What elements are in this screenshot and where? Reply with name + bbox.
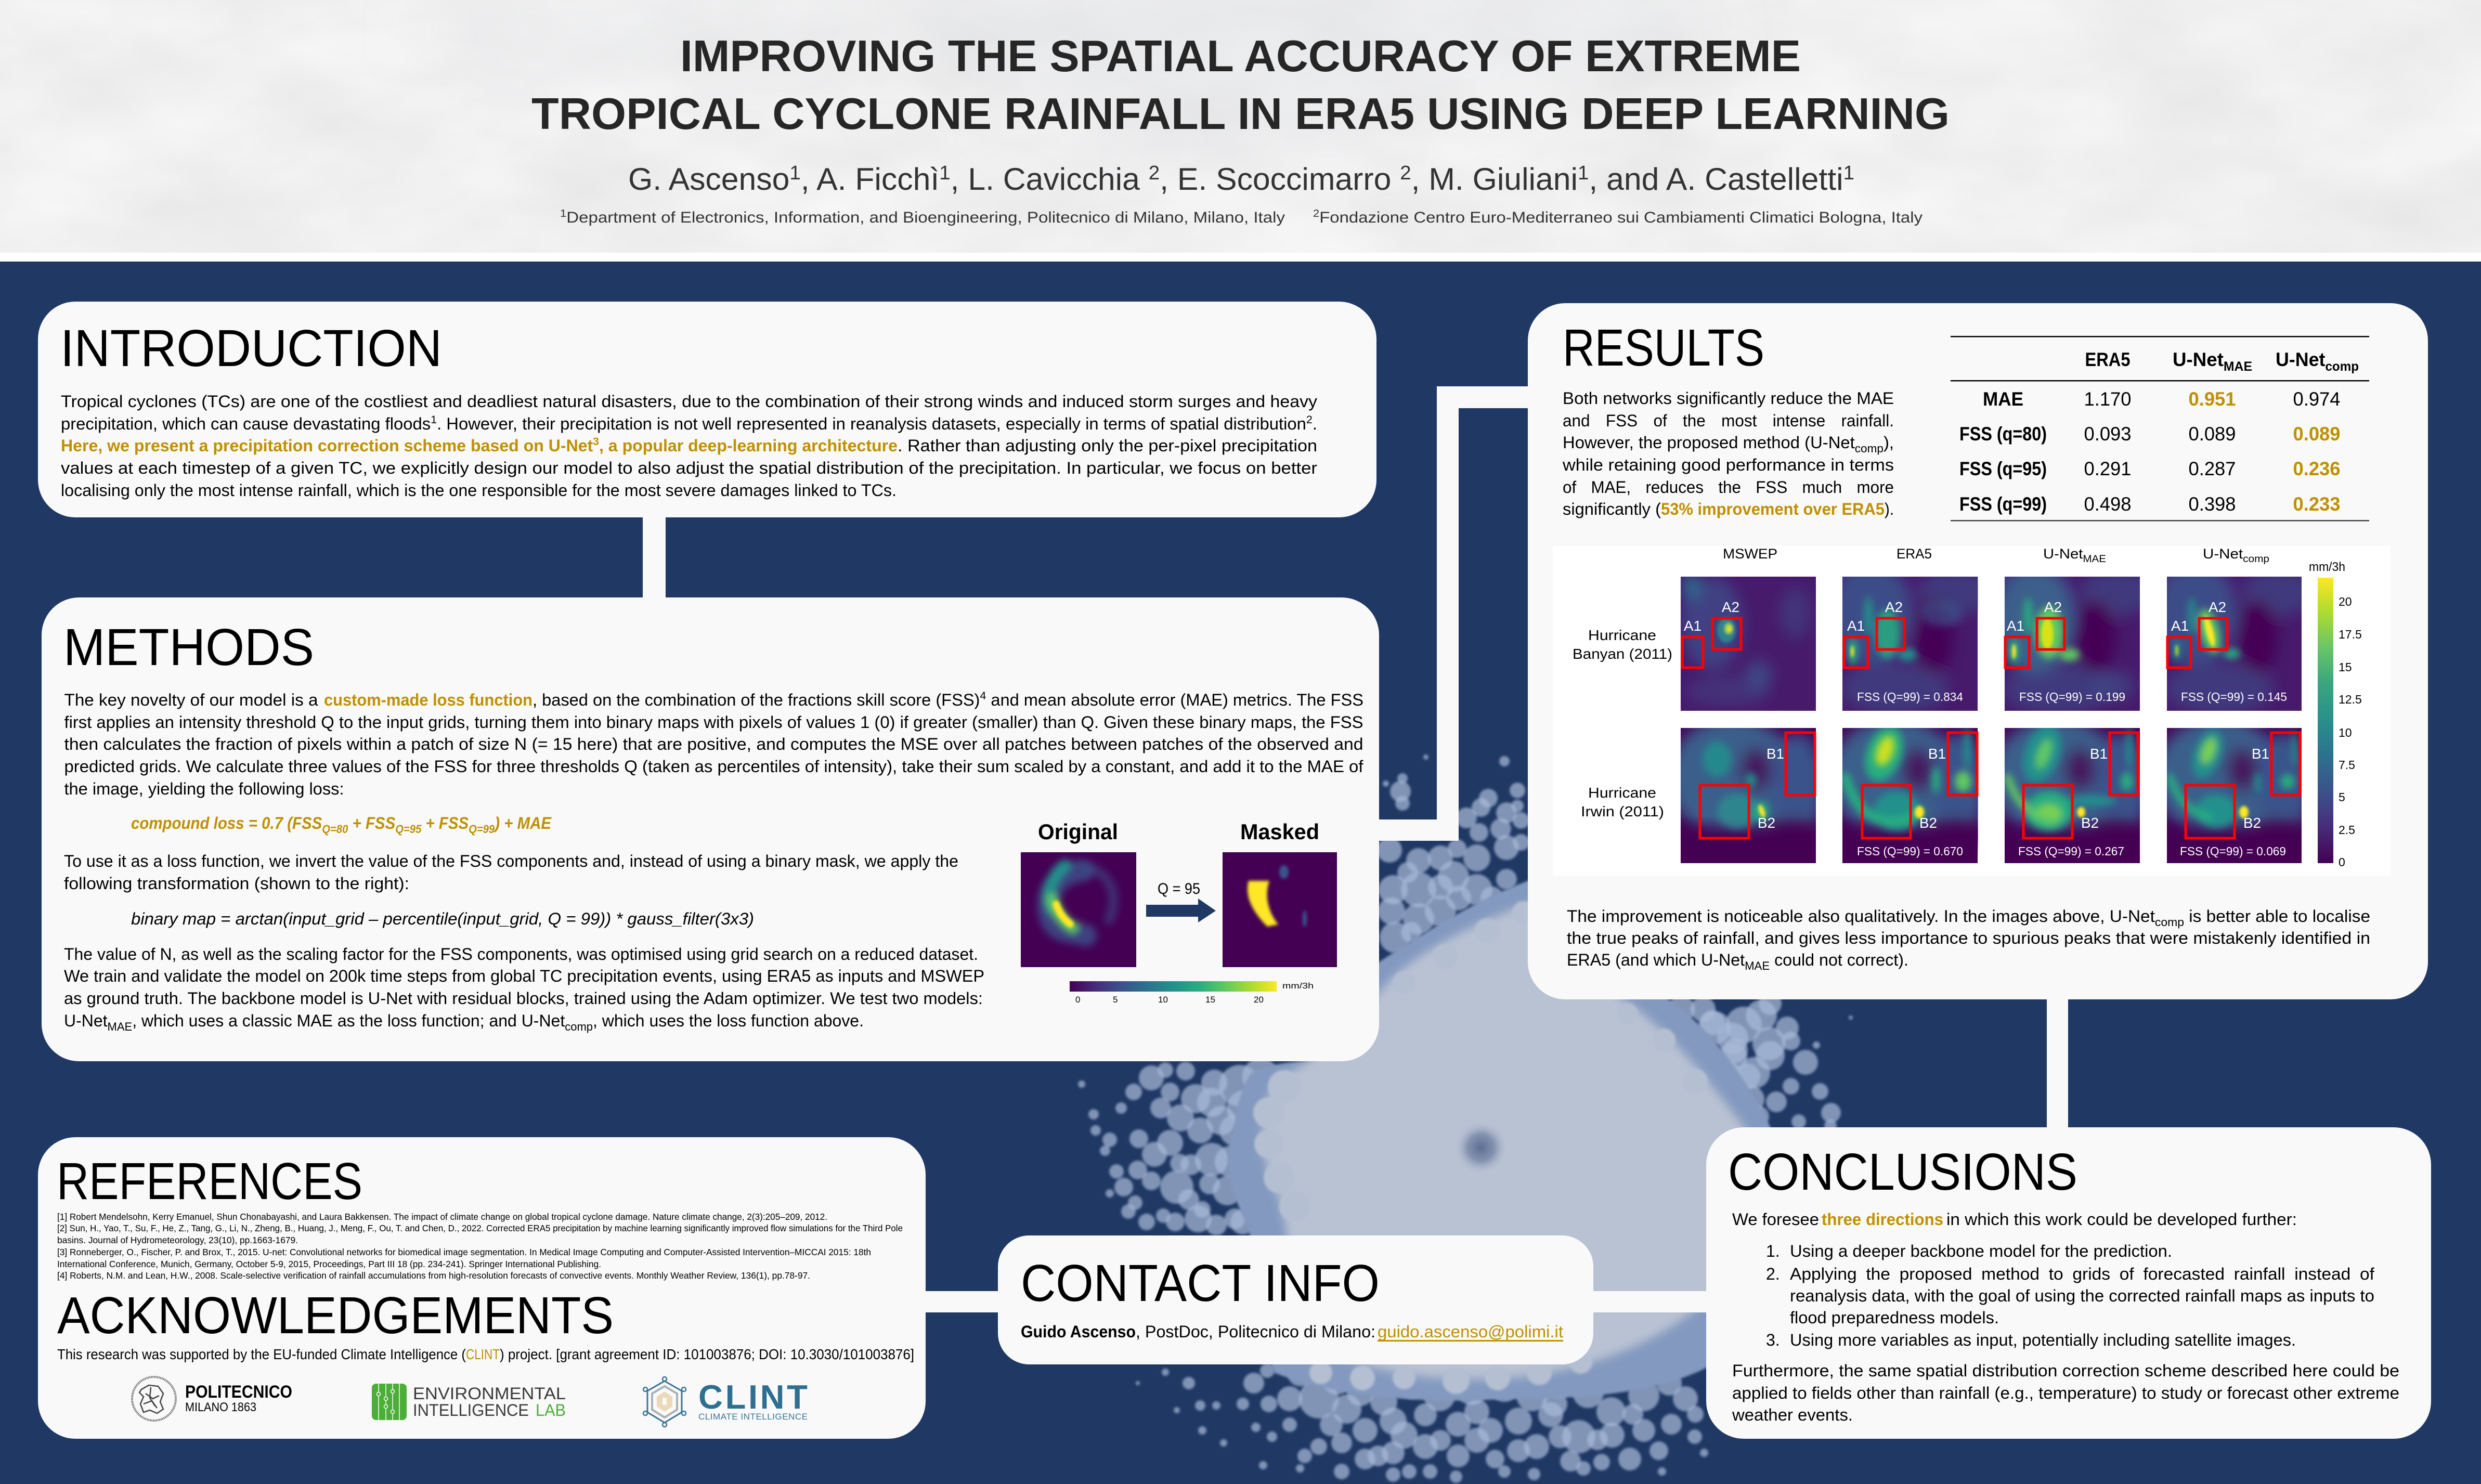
column titles: ERA5: [1897, 546, 1932, 562]
table: metrics: FSS (q=80): [1959, 423, 2047, 445]
region labels: A1: [1684, 618, 1701, 634]
text block: results summary: of MAE, reduces the FSS much more: [1563, 478, 1894, 497]
authors: G. Ascenso1, A. Ficchì1, L. Cavicchia 2, E. Scoccimarro 2, M. Giuliani1, and A. Castelletti1: [628, 162, 1854, 197]
text block: results qualitative: ERA5 (and which U-NetMAE could not correct).: [1567, 951, 1908, 972]
label: Q = 95: Q = 95: [1158, 880, 1200, 897]
heatmap: banyan U-Net comp: [2167, 577, 2302, 711]
text block: results summary: while retaining good performance in terms: [1562, 455, 1894, 474]
title: [531, 32, 1950, 139]
list: three directions: reanalysis data, with the goal of using the corrected rainfall maps as inputs to: [1790, 1286, 2374, 1305]
list: three directions: flood preparedness models.: [1790, 1308, 1999, 1327]
header band: [0, 0, 2481, 262]
region labels: A1: [2007, 618, 2024, 634]
red boxes: A1 A2 B1 B2: [1682, 618, 2300, 838]
logo: Environmental Intelligence Lab: INTELLIGENCE: [413, 1401, 529, 1420]
table: metrics: MAE: [1983, 388, 2023, 410]
colorbar: 15: [1205, 995, 1215, 1005]
region labels: A1: [2171, 618, 2189, 634]
heading: methods: METHODS: [63, 618, 314, 676]
table: metrics: 0.236: [2293, 458, 2340, 479]
table: metrics: [1951, 336, 2369, 521]
text block: training: [64, 945, 984, 1033]
text block: loss description: then calculates the fraction of pixels within a patch of size N (= 15 here) that are positive, and computes the MSE over all patches between patches of the observed and: [64, 735, 1363, 753]
text block: references list: [57, 1212, 903, 1281]
text block: loss description: The key novelty of our model is a: [64, 691, 318, 709]
label: original: Original: [1038, 819, 1118, 844]
text block: acknowledgements: ) project. [grant agreement ID: 101003876; DOI: 10.3030/101003876]: [500, 1346, 914, 1362]
region labels: A1: [1847, 618, 1865, 634]
connector: results to conclusions: [2047, 996, 2068, 1131]
label: hurricane banyan: Hurricane: [1588, 627, 1656, 643]
text block: closing remarks: applied to fields other than rainfall (e.g., temperature) to study or forecast other extreme: [1732, 1384, 2399, 1402]
text block: closing remarks: Furthermore, the same spatial distribution correction scheme described here could be: [1732, 1361, 2399, 1380]
text block: introduction body: values at each timestep of a given TC, we explicitly design our model to also adjust the spatial distribution of the precipitation. In particular, we focus on better: [61, 459, 1317, 477]
panel: contact info: [998, 1235, 1593, 1364]
region labels: B2: [1919, 815, 1937, 831]
heatmap: masked: [1223, 852, 1337, 967]
colorbar: mm/3h: 0: [2339, 855, 2345, 869]
text block: results summary: 53% improvement over ERA5: [1661, 500, 1885, 518]
region labels: B2: [2243, 815, 2261, 831]
heatmap: original: [1021, 852, 1136, 967]
text block: introduction body: precipitation, which can cause devastating floods 1. However, their precipitation is not well represented in reanalysis datasets, especially in terms of spatial distribution 2.: [61, 414, 1317, 433]
text block: introduction body: Tropical cyclones (TCs) are one of the costliest and deadliest natural disasters, due to the combination of their strong winds and induced storm surges and heavy: [61, 392, 1317, 411]
list: three directions: 2.: [1766, 1265, 1780, 1283]
table: metrics: 0.498: [2084, 493, 2131, 515]
text block: acknowledgements: [57, 1346, 914, 1362]
heatmap: banyan MSWEP: [1681, 577, 1816, 711]
heatmap: irwin U-Net MAE: [2005, 728, 2140, 863]
text block: introduction body: Here, we present a precipitation correction scheme based on U-Net3, a popular deep-learning architecture: [61, 436, 898, 455]
FSS labels: FSS (Q=99) = 0.670: [1857, 844, 1963, 858]
text block: intro sentence: [1732, 1210, 2297, 1229]
text block: training: We train and validate the model on 200k time steps from global TC precipitation events, using ERA5 as inputs and MSWEP: [64, 967, 984, 985]
text block: results summary: Both networks significantly reduce the MAE: [1563, 389, 1894, 408]
FSS labels: FSS (Q=99) = 0.834: [1857, 690, 1963, 704]
region labels: A2: [2044, 599, 2062, 615]
text block: results summary: [1562, 389, 1894, 518]
text block: loss description: predicted grids. We calculate three values of the FSS for three thresholds Q (taken as percentiles of intensity), take their sum scaled by a constant, and add it to the MAE of: [64, 757, 1363, 776]
panel: conclusions: [1706, 1127, 2431, 1439]
text block: results summary: ).: [1885, 500, 1894, 518]
FSS labels: FSS (Q=99) = 0.145: [2181, 690, 2287, 704]
affiliations: 2Fondazione Centro Euro-Mediterraneo sui Cambiamenti Climatici Bologna, Italy: [1313, 208, 1923, 226]
list: three directions: [1766, 1242, 2374, 1349]
text block: training: The value of N, as well as the scaling factor for the FSS components, was optimised using grid search on a reduced dataset.: [64, 945, 978, 964]
heading: references: REFERENCES: [57, 1152, 362, 1210]
logo: Environmental Intelligence Lab: LAB: [536, 1401, 566, 1420]
cyclone satellite image: [1078, 754, 1853, 1483]
heatmap: banyan U-Net MAE: [2005, 577, 2140, 711]
text block: introduction body: localising only the most intense rainfall, which is the one responsible for the most severe damages linked to TCs.: [61, 481, 897, 500]
text block: results qualitative: The improvement is noticeable also qualitatively. In the images above, U-Net comp is better able to localise: [1567, 907, 2370, 929]
text block: closing remarks: [1732, 1361, 2399, 1424]
title: IMPROVING THE SPATIAL ACCURACY OF EXTREME: [680, 32, 1801, 81]
region labels: B1: [2252, 746, 2269, 762]
heatmap: irwin U-Net comp: [2167, 728, 2302, 863]
table: metrics: FSS (q=99): [1959, 493, 2047, 515]
colorbar: mm/3h: 2.5: [2339, 823, 2355, 837]
list: three directions: 3.: [1766, 1331, 1780, 1349]
label: hurricane irwin: [1581, 785, 1664, 819]
list: three directions: 1.: [1766, 1242, 1780, 1260]
text block: references list: [3] Ronneberger, O., Fischer, P. and Brox, T., 2015. U-net: Convolutional networks for biomedical image segmentation. In Medical Image Computing and Computer-Assisted Intervention–MICCAI 2015: 18th: [57, 1247, 871, 1257]
panel: references and acknowledgements: [38, 1137, 926, 1439]
text block: references list: [2] Sun, H., Yao, T., Su, F., He, Z., Tang, G., Li, N., Zheng, B., Huang, J., Meng, F., Ou, T. and Chen, D., 2022. Corrected ERA5 precipitation by machine learning significantly improved flow simulations for the Third Pole: [57, 1223, 903, 1233]
region labels: B2: [2081, 815, 2099, 831]
FSS labels: FSS (Q=99) = 0.069: [2180, 844, 2286, 858]
text block: results summary: significantly (: [1563, 500, 1661, 518]
logo: Environmental Intelligence Lab: [372, 1384, 566, 1420]
text block: references list: [4] Roberts, N.M. and Lean, H.W., 2008. Scale-selective verification of rainfall accumulations from high-resolution forecasts of convective events. Monthly Weather Review, 136(1), pp.78-97.: [57, 1270, 810, 1281]
table: metrics: 0.089: [2293, 423, 2340, 445]
text block: intro sentence: three directions: [1822, 1210, 1943, 1229]
affiliations: 1Department of Electronics, Information, and Bioengineering, Politecnico di Milano, Milano, Italy: [560, 208, 1285, 226]
formula: compound loss: compound loss = 0.7 (FSSQ=80 + FSSQ=95 + FSSQ=99) + MAE: [131, 814, 552, 836]
panel: methods: [42, 597, 1379, 1061]
text block: results qualitative: [1567, 907, 2370, 972]
colorbar: 20: [1254, 995, 1264, 1005]
text block: results summary: However, the proposed method (U-Net comp),: [1563, 433, 1894, 455]
text block: contact details: [1021, 1322, 1563, 1342]
heatmap: banyan ERA5: [1842, 577, 1978, 711]
text block: loss description: [64, 690, 1363, 798]
connector: introduction to methods: [643, 515, 666, 601]
connector: references to contact to conclusions: [920, 1291, 1711, 1312]
table: metrics: ERA5: [2085, 349, 2130, 370]
table: metrics: 0.974: [2293, 388, 2340, 410]
text block: contact details: Guido Ascenso: [1021, 1322, 1136, 1341]
label: hurricane irwin: Irwin (2011): [1581, 803, 1664, 819]
text block: intro sentence: in which this work could be developed further:: [1946, 1210, 2297, 1229]
panel: results: [1528, 303, 2428, 999]
region labels: B1: [2090, 746, 2108, 762]
region labels: B2: [1758, 815, 1775, 831]
formula: binary map: binary map = arctan(input_grid – percentile(input_grid, Q = 99)) * gauss_filter(3x3): [131, 909, 754, 928]
connector: methods to results: [1373, 386, 1534, 841]
colorbar: mm/3h: 17.5: [2339, 628, 2362, 641]
text block: intro sentence: We foresee: [1732, 1210, 1819, 1229]
text block: contact details: , PostDoc, Politecnico di Milano:: [1136, 1322, 1375, 1341]
colorbar: 5: [1113, 995, 1118, 1005]
logo: CLINT: [643, 1377, 808, 1427]
region labels: A2: [1885, 599, 1903, 615]
text block: loss description: , based on the combination of the fractions skill score (FSS) 4 and mean absolute error (MAE) metrics. The FSS: [532, 690, 1363, 709]
text block: results qualitative: the true peaks of rainfall, and gives less importance to spurious peaks that were mistakenly identified in: [1567, 929, 2370, 947]
colorbar: mm/3h: mm/3h: [2309, 560, 2345, 574]
FSS labels: FSS (Q=99) = 0.267: [2018, 844, 2124, 858]
heading: conclusions: CONCLUSIONS: [1728, 1143, 2077, 1201]
title: TROPICAL CYCLONE RAINFALL IN ERA5 USING DEEP LEARNING: [531, 89, 1950, 139]
heatmap: irwin ERA5: [1842, 728, 1978, 863]
table: metrics: U-Netcomp: [2276, 349, 2359, 374]
colorbar: mm/3h: [2309, 560, 2362, 869]
table: metrics: 0.287: [2188, 458, 2236, 479]
label: hurricane banyan: Banyan (2011): [1573, 646, 1672, 662]
column titles: [1723, 546, 2269, 565]
region labels: A2: [1722, 599, 1739, 615]
list: three directions: Applying the proposed method to grids of forecasted rainfall instead of: [1790, 1265, 2374, 1283]
table: metrics: FSS (q=95): [1959, 458, 2047, 479]
logo: Politecnico di Milano: MILANO 1863: [185, 1400, 256, 1414]
logo: CLINT: CLIMATE INTELLIGENCE: [698, 1412, 808, 1422]
colorbar: mm/3h: 12.5: [2339, 693, 2362, 706]
region labels: A2: [2209, 599, 2226, 615]
heading: acknowledgements: ACKNOWLEDGEMENTS: [57, 1286, 614, 1345]
table: metrics: U-NetMAE: [2173, 349, 2252, 374]
table: metrics: 0.291: [2084, 458, 2131, 479]
heatmap: irwin MSWEP: [1681, 728, 1816, 863]
text block: training: as ground truth. The backbone model is U-Net with residual blocks, trained using the Adam optimizer. We test two models:: [64, 989, 983, 1008]
text block: transformation: following transformation (shown to the right):: [64, 874, 409, 893]
text block: loss description: first applies an intensity threshold Q to the input grids, turning them into binary maps with pixels of values 1 (0) if greater (smaller) than Q. Given these binary maps, the FSS: [64, 713, 1363, 732]
text block: closing remarks: weather events.: [1732, 1405, 1853, 1424]
logo: Politecnico di Milano: POLITECNICO: [185, 1382, 292, 1402]
colorbar: mm/3h: 20: [2339, 595, 2352, 608]
table: metrics: 0.093: [2084, 423, 2131, 445]
text block: loss description: custom-made loss function: [324, 691, 532, 709]
text block: introduction body: . Rather than adjusting only the per-pixel precipitation: [898, 436, 1317, 455]
colorbar: mm/3h: [1282, 982, 1314, 991]
list: three directions: Using a deeper backbone model for the prediction.: [1790, 1242, 2172, 1260]
text block: references list: International Conference, Munich, Germany, October 5-9, 2015, Proceedings, Part III 18 (pp. 234-241). Springer International Publishing.: [57, 1259, 601, 1269]
text block: transformation: To use it as a loss function, we invert the value of the FSS components and, instead of using a binary mask, we apply the: [64, 852, 958, 870]
colorbar: mm/3h: 10: [2339, 726, 2352, 739]
table: metrics: 0.089: [2188, 423, 2236, 445]
colorbar: [1070, 981, 1314, 1005]
FSS labels: [1857, 690, 2287, 858]
text block: results summary: and FSS of the most intense rainfall.: [1563, 411, 1894, 430]
colorbar: mm/3h: 7.5: [2339, 758, 2355, 772]
text block: references list: basins. Journal of Hydrometeorology, 23(10), pp.1663-1679.: [57, 1235, 298, 1245]
figure: hurricane rainfall maps: [1553, 546, 2391, 876]
logo: Politecnico di Milano: [132, 1377, 292, 1421]
label: masked: Masked: [1240, 819, 1319, 844]
column titles: MSWEP: [1723, 546, 1777, 562]
text block: contact details: guido.ascenso@polimi.it: [1378, 1322, 1563, 1341]
colorbar: mm/3h: 5: [2339, 790, 2345, 804]
text block: transformation: [64, 852, 958, 893]
text block: training: U-NetMAE, which uses a classic MAE as the loss function; and U-Netcomp, which uses the loss function above.: [64, 1011, 864, 1033]
text block: introduction body: [61, 392, 1317, 500]
table: metrics: 0.398: [2188, 493, 2236, 515]
label: hurricane banyan: [1573, 627, 1672, 662]
text block: loss description: the image, yielding the following loss:: [64, 779, 344, 798]
region labels: B1: [1766, 746, 1784, 762]
region labels: [1684, 599, 2269, 831]
table: metrics: 0.233: [2293, 493, 2340, 515]
heading: introduction: INTRODUCTION: [60, 319, 442, 377]
affiliations: [560, 208, 1923, 226]
colorbar: 0: [1075, 995, 1080, 1005]
colorbar: mm/3h: 15: [2339, 660, 2352, 674]
region labels: B1: [1928, 746, 1946, 762]
logo: CLINT: CLINT: [698, 1378, 808, 1416]
column titles: U-Net comp: [2203, 546, 2269, 565]
list: three directions: Using more variables as input, potentially including satellite images.: [1790, 1331, 2296, 1349]
label: hurricane irwin: Hurricane: [1588, 785, 1656, 801]
table: metrics: 1.170: [2084, 388, 2131, 410]
text block: acknowledgements: This research was supported by the EU-funded Climate Intelligence (: [57, 1346, 466, 1362]
panel: introduction: [38, 302, 1376, 517]
FSS labels: FSS (Q=99) = 0.199: [2019, 690, 2125, 704]
figure: original vs masked: [1021, 819, 1337, 1005]
column titles: U-Net MAE: [2043, 546, 2106, 565]
logo: Environmental Intelligence Lab: ENVIRONMENTAL: [413, 1384, 566, 1403]
text block: acknowledgements: CLINT: [466, 1346, 500, 1362]
colorbar: 10: [1158, 995, 1168, 1005]
heading: contact info: CONTACT INFO: [1021, 1254, 1380, 1312]
heading: results: RESULTS: [1563, 319, 1764, 377]
text block: references list: [1] Robert Mendelsohn, Kerry Emanuel, Shun Chonabayashi, and Laura Bakkensen. The impact of climate change on global tropical cyclone damage. Nature climate change, 2(3):205–209, 2012.: [57, 1212, 827, 1222]
arrow: [1146, 899, 1216, 922]
table: metrics: 0.951: [2188, 388, 2236, 410]
